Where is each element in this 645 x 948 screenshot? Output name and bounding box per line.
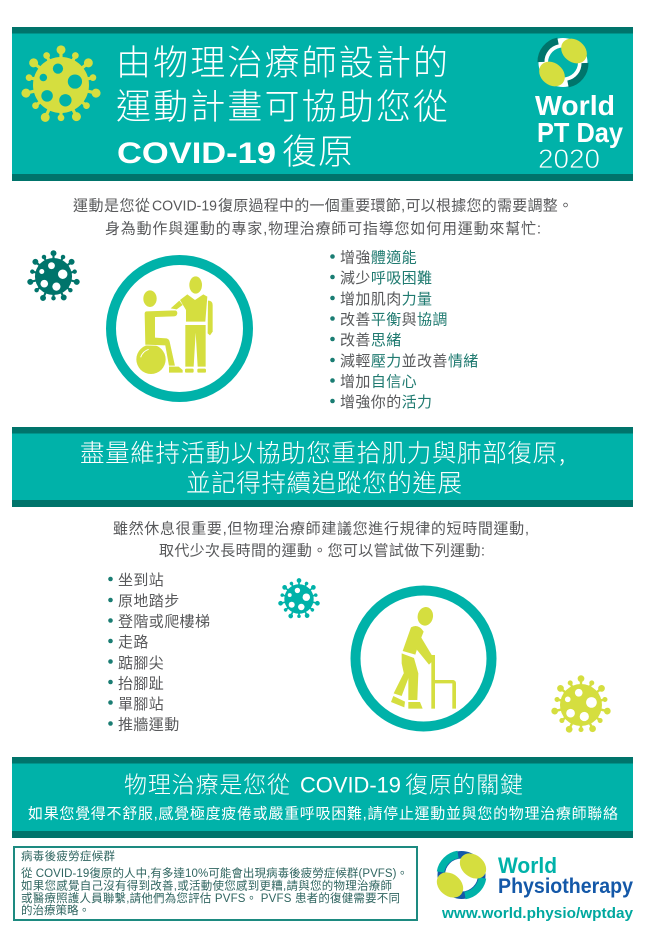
banner: stay active <box>12 427 633 507</box>
logo: World Physiotherapy: World <box>498 853 557 878</box>
icon: World Physiotherapy emblem <box>432 848 491 903</box>
list: suggested exercises: 走路 <box>118 634 149 651</box>
list: benefits of exercise: 減輕壓力並改善情緒 <box>340 353 479 370</box>
logo: World PT Day 2020: PT Day <box>537 117 623 148</box>
list: suggested exercises: 原地踏步 <box>118 593 180 610</box>
intro text: COVID-19 <box>152 198 217 214</box>
list: suggested exercises: 登階或爬樓梯 <box>118 614 210 630</box>
list: suggested exercises: 單腳站 <box>118 696 164 713</box>
list: suggested exercises: 推牆運動 <box>118 716 180 734</box>
advice text: 取代少次長時間的運動。您可以嘗試做下列運動: <box>159 542 485 560</box>
title: 運動計畫可協助您從 <box>116 79 448 130</box>
title <box>116 35 448 175</box>
list: benefits of exercise: 增加肌肉力量 <box>340 291 432 308</box>
intro text: 復原過程中的一個重要環節,可以根據您的需要調整。 <box>218 196 573 214</box>
icon: World PT Day emblem <box>534 34 592 91</box>
banner: stay active: , <box>559 434 565 470</box>
icon: teal virus <box>278 578 320 619</box>
logo: World Physiotherapy: Physiotherapy <box>498 875 633 898</box>
logo: World Physiotherapy: www.world.physio/wptday <box>441 906 633 922</box>
list: benefits of exercise: 增強你的活力 <box>340 394 432 411</box>
list: suggested exercises: 坐到站 <box>118 572 164 589</box>
list: benefits of exercise: 增加自信心 <box>340 374 417 390</box>
logo: World PT Day 2020 <box>534 34 623 174</box>
callout: post-viral fatigue syndrome: 從 COVID-19復原的人中,有多達10%可能會出現病毒後疲勞症候群(PVFS)。 <box>21 866 408 880</box>
callout: post-viral fatigue syndrome: 或醫療照護人員聯繫,請他們為您評估 PVFS。 PVFS 患者的復健需要不同 <box>21 891 400 905</box>
callout: post-viral fatigue syndrome: 的治療策略。 <box>21 903 90 917</box>
banner: key to recovery: COVID-19 <box>300 772 401 798</box>
banner: stay active: 並記得持續追蹤您的進展 <box>186 464 462 500</box>
icon: lime virus in header <box>21 45 101 123</box>
logo: World Physiotherapy <box>432 848 633 922</box>
banner: key to recovery: 如果您覺得不舒服,感覺極度疲倦或嚴重呼吸困難,請停止運動並與您的物理治療師聯絡 <box>28 804 618 822</box>
banner: key to recovery: 復原的關鍵 <box>405 766 523 800</box>
advice text <box>113 520 529 560</box>
icon: lime virus <box>551 675 611 734</box>
title: COVID-19 <box>117 137 276 170</box>
title: 由物理治療師設計的 <box>116 35 448 86</box>
icon: person stepping with chair support <box>356 590 492 726</box>
advice text: 雖然休息很重要,但物理治療師建議您進行規律的短時間運動, <box>113 520 529 538</box>
logo: World PT Day 2020: World <box>535 90 615 121</box>
intro text <box>73 196 573 238</box>
list: benefits of exercise: 增強體適能 <box>340 248 417 266</box>
logo: World PT Day 2020: 2020 <box>538 144 600 174</box>
intro text: 運動是您從 <box>73 198 150 214</box>
list: benefits of exercise: 改善平衡與協調 <box>340 312 448 328</box>
callout: post-viral fatigue syndrome <box>14 847 417 920</box>
list: benefits of exercise: 改善思緒 <box>340 332 402 349</box>
callout: post-viral fatigue syndrome: 病毒後疲勞症候群 <box>21 849 116 863</box>
icon: therapist with patient on exercise ball <box>111 260 248 397</box>
list: benefits of exercise: 減少呼吸困難 <box>340 270 432 287</box>
banner: key to recovery <box>12 757 633 838</box>
callout: post-viral fatigue syndrome: 如果您感覺自己沒有得到改善,或活動使您感到更糟,請與您的物理治療師 <box>21 878 392 892</box>
icon: dark green virus <box>27 250 80 302</box>
header banner <box>12 27 633 181</box>
list: suggested exercises <box>108 572 210 734</box>
banner: stay active: 盡量維持活動以協助您重拾肌力與肺部復原 <box>80 434 557 470</box>
title: 復原 <box>282 124 353 175</box>
list: suggested exercises: 抬腳趾 <box>118 676 164 692</box>
list: benefits of exercise <box>330 248 479 411</box>
intro text: 身為動作與運動的專家,物理治療師可指導您如何用運動來幫忙: <box>105 220 541 238</box>
list: suggested exercises: 踮腳尖 <box>118 655 164 672</box>
banner: key to recovery: 物理治療是您從 <box>124 766 290 800</box>
